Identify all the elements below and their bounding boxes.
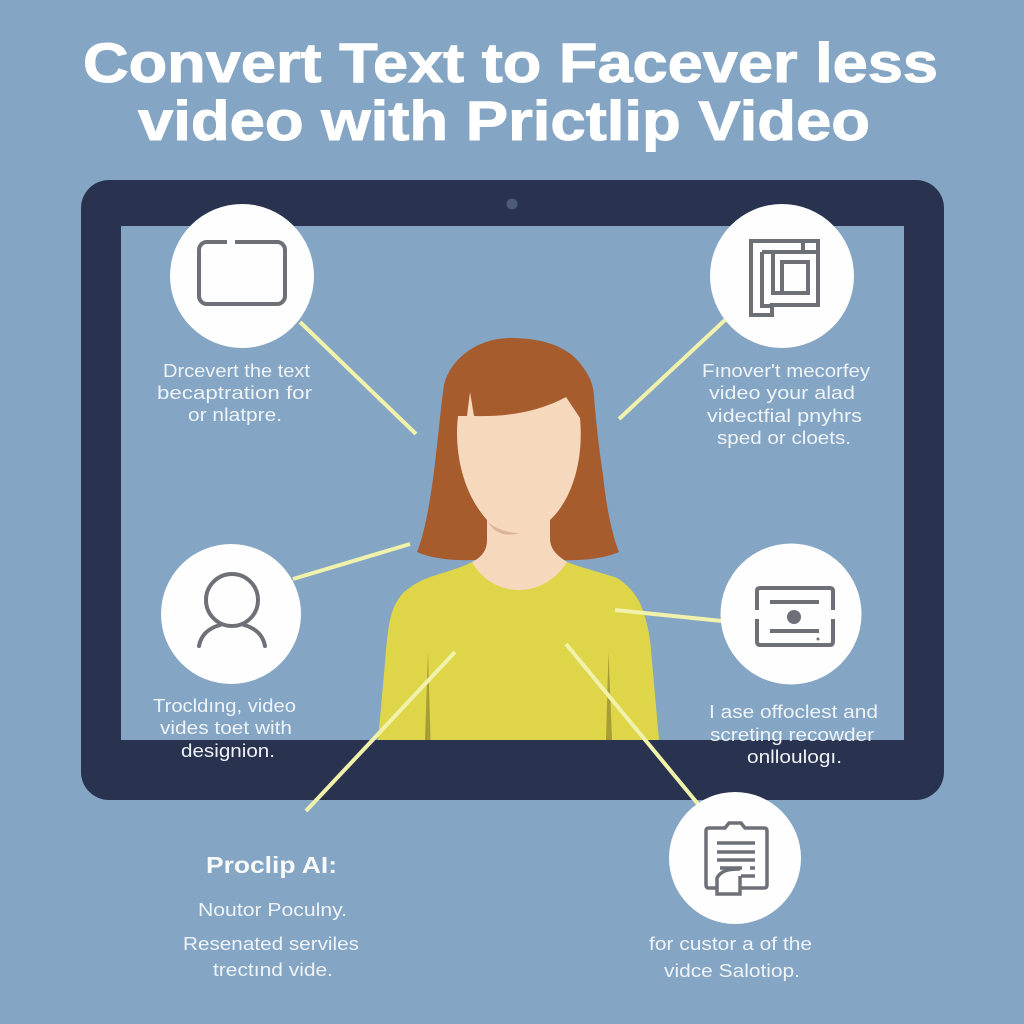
shirt fold right [606, 652, 612, 740]
tablet frame [81, 180, 944, 800]
icon: user [161, 544, 301, 684]
text block: sped or cloets. [717, 428, 851, 448]
text block: trectınd vide. [213, 960, 333, 980]
text block: I ase offoclest and [709, 702, 878, 722]
shirt fold left [425, 652, 430, 740]
title: video with Prictlip Video [138, 89, 870, 152]
panel: bottom-left text [183, 852, 359, 980]
text block: Noutor Poculny. [198, 900, 347, 920]
text block: becaptration for [157, 383, 312, 403]
face [457, 392, 581, 520]
panel: middle-right feature [709, 544, 878, 767]
text block: vides toet with [160, 718, 292, 738]
chin shadow [488, 522, 520, 535]
text block [157, 361, 312, 425]
hair [417, 338, 619, 560]
text block: for custor a of the [649, 934, 812, 954]
text block [153, 696, 296, 761]
heading: Proclip AI: [206, 852, 337, 878]
shirt [378, 562, 659, 740]
text block: videctfial pnyhrs [707, 406, 862, 426]
person illustration [378, 338, 659, 740]
text block: or nlatpre. [188, 405, 282, 425]
text block: vidce Salotiop. [664, 961, 800, 981]
text block [183, 900, 359, 980]
text block [649, 934, 812, 981]
text block: onlloulogı. [747, 747, 842, 767]
text block: Resenated serviles [183, 934, 359, 954]
text block [702, 361, 870, 448]
panel: top-left feature [157, 204, 314, 425]
title: Convert Text to Facever less [83, 31, 938, 94]
title [83, 31, 938, 152]
panel: top-right feature [702, 204, 870, 448]
text block: video your alad [709, 383, 855, 403]
neck [472, 510, 567, 590]
text block: Drcevert the text [163, 361, 310, 381]
icon: screen frame [170, 204, 314, 348]
text block: Fınover't mecorfey [702, 361, 870, 381]
icon: layered frames [710, 204, 854, 348]
connector lines [293, 320, 725, 811]
text block: screting recowder [710, 725, 874, 745]
icon: clipboard document [669, 792, 801, 924]
text block: Trocldıng, video [153, 696, 296, 716]
panel: middle-left feature [153, 544, 301, 761]
text block: designion. [181, 741, 275, 761]
panel: bottom-right feature [649, 792, 812, 981]
icon: video card [720, 544, 862, 684]
text block [709, 702, 878, 767]
